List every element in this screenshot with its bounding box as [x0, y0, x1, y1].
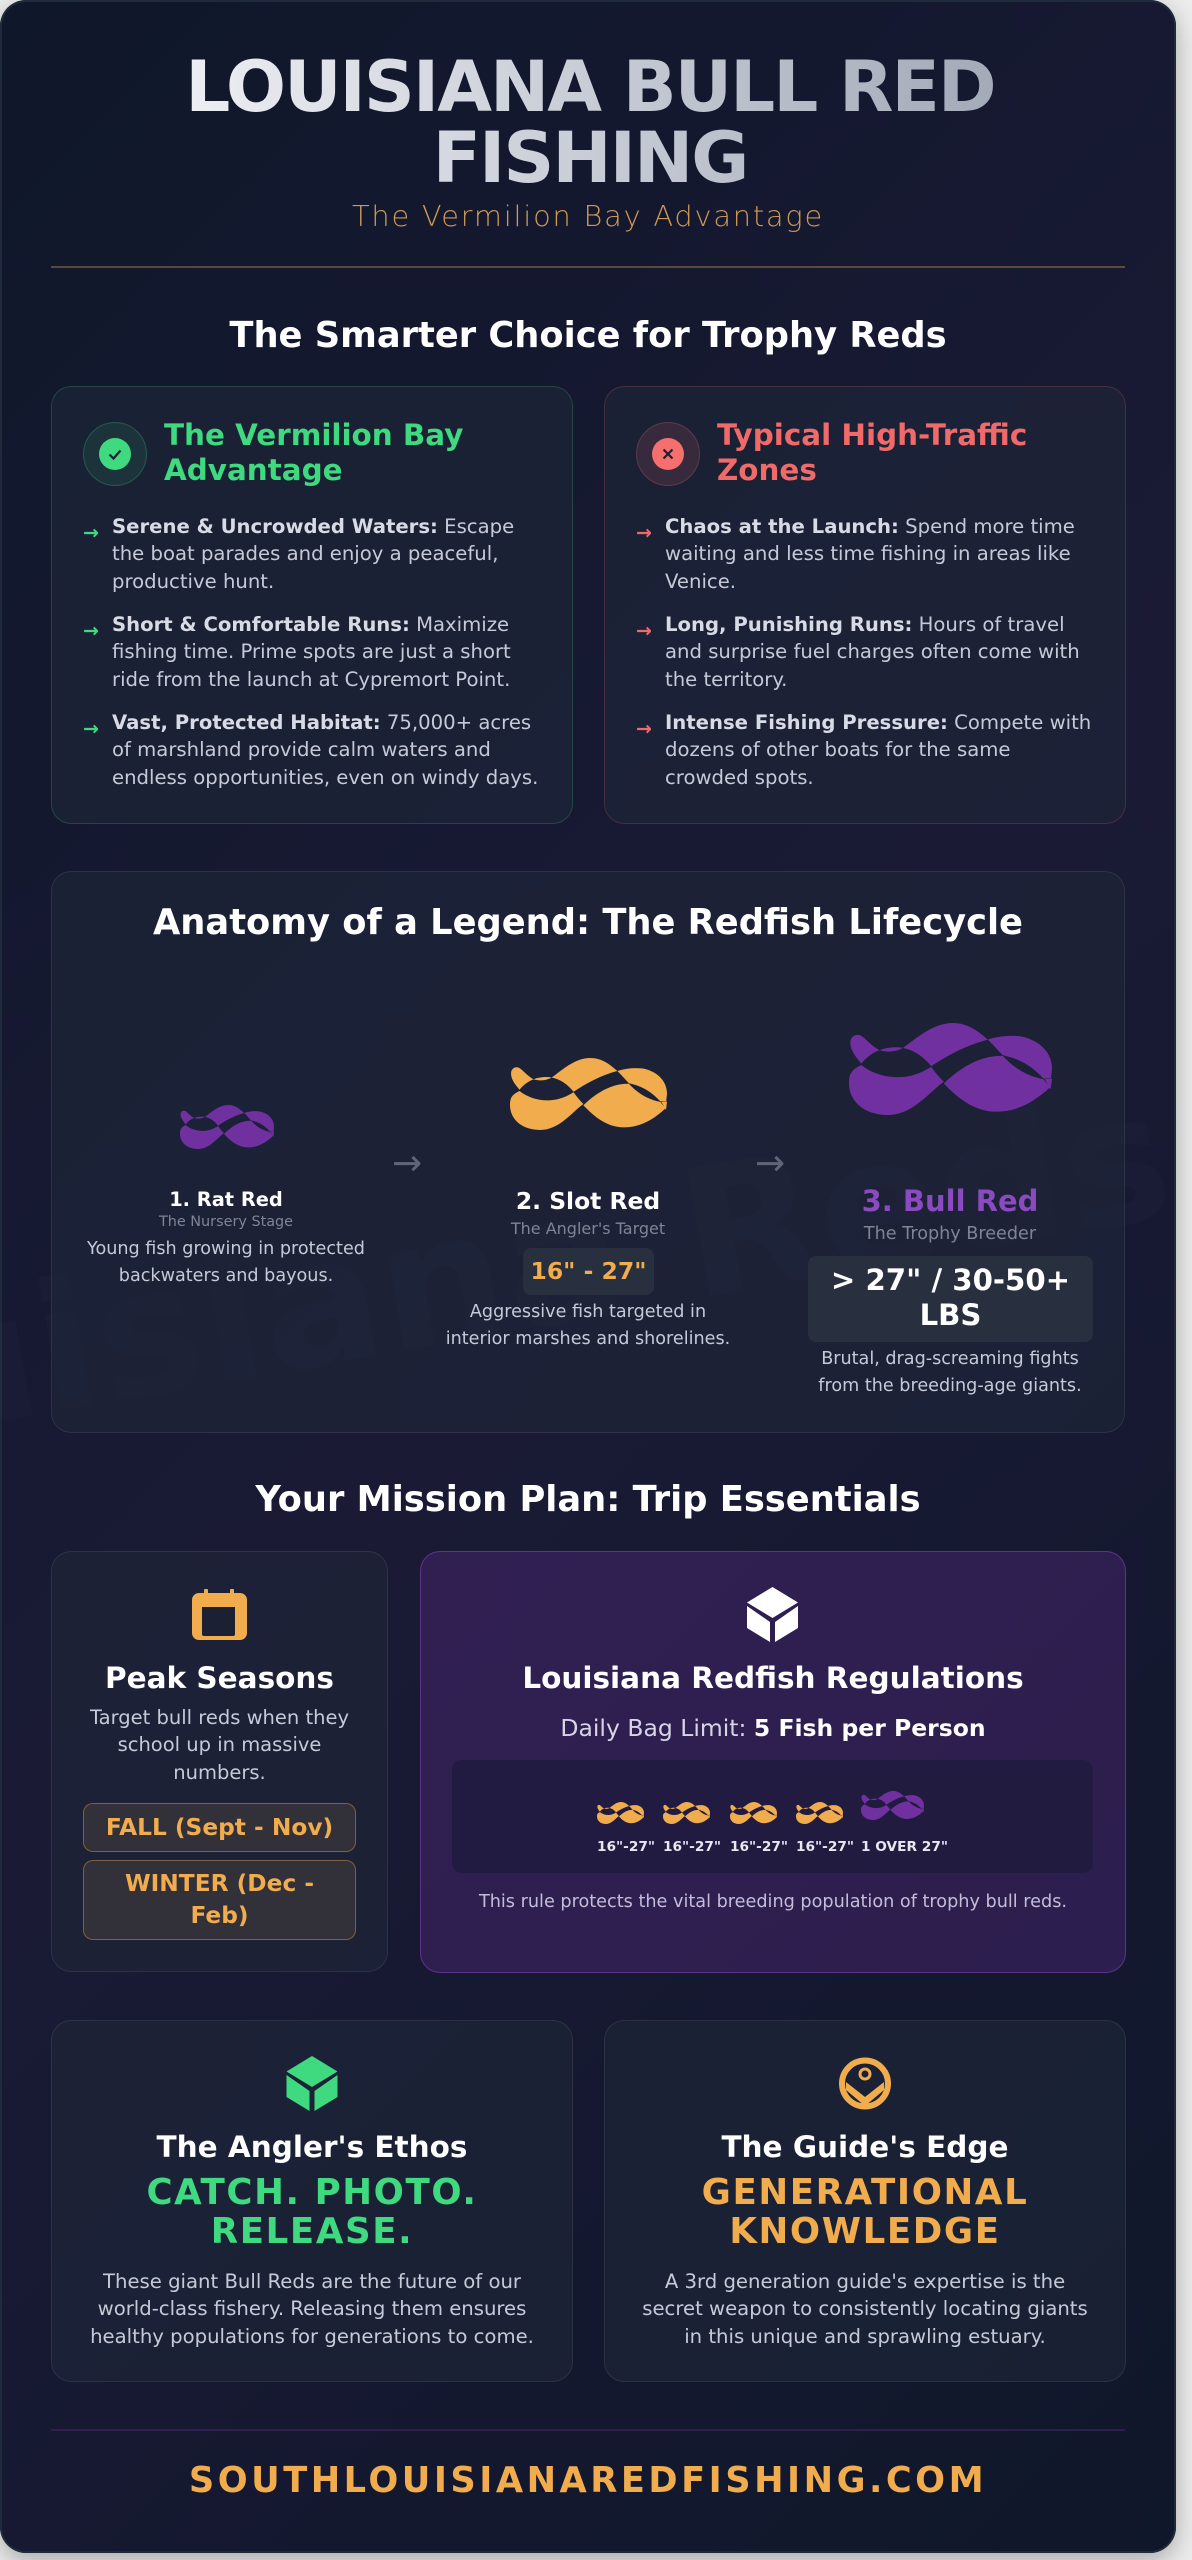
- stage subtitle: The Angler's Target: [511, 1219, 665, 1238]
- stage subtitle: The Nursery Stage: [159, 1214, 293, 1230]
- panel: angler's ethos: [51, 2020, 573, 2382]
- heading: mission plan: Your Mission Plan: Trip Essentials: [255, 1479, 921, 1520]
- panel: high traffic zones: [604, 386, 1126, 824]
- text: A 3rd generation guide's expertise is the: [665, 2270, 1065, 2293]
- panel: regulations: [420, 1551, 1126, 1973]
- text: healthy populations for generations to come.: [90, 2325, 534, 2348]
- title: LOUISIANA BULL RED FISHING: [185, 45, 995, 199]
- panel title: Advantage: [164, 453, 343, 487]
- stage name: 3. Bull Red: [862, 1184, 1038, 1218]
- list item 1: Chaos at the Launch: Spend more time: [665, 515, 1075, 538]
- title: The Angler's Ethos: [157, 2130, 467, 2164]
- slogan: GENERATIONAL: [702, 2172, 1028, 2213]
- list item 1: [112, 515, 514, 593]
- list item 1: productive hunt.: [112, 570, 274, 593]
- description: [446, 1302, 730, 1349]
- text: [642, 2270, 1088, 2348]
- text: [90, 2270, 534, 2348]
- footer url: SOUTHLOUISIANAREDFISHING.COM: [189, 2460, 987, 2501]
- list item 3: dozens of other boats for the same: [665, 738, 1010, 761]
- note: This rule protects the vital breeding population of trophy bull reds.: [479, 1892, 1067, 1912]
- slogan: RELEASE.: [211, 2211, 413, 2252]
- list item 1: [665, 515, 1075, 593]
- icon: target: [839, 2058, 891, 2110]
- slogan: [702, 2172, 1028, 2252]
- icon: calendar: [192, 1589, 247, 1640]
- size pill: 16" - 27": [530, 1257, 646, 1285]
- description: from the breeding-age giants.: [818, 1376, 1082, 1396]
- label 4: 16"-27": [796, 1839, 854, 1855]
- panel: guide's edge: [604, 2020, 1126, 2382]
- panel: peak seasons: [51, 1551, 388, 1972]
- heading: smarter choice: The Smarter Choice for Trophy Reds: [229, 315, 947, 356]
- list item 1: Serene & Uncrowded Waters: Escape: [112, 515, 514, 538]
- icon: white cube: [747, 1587, 798, 1642]
- fish icon: [849, 1023, 1052, 1115]
- text: These giant Bull Reds are the future of our: [103, 2270, 521, 2293]
- season: winter: [83, 1860, 356, 1940]
- fish icon: [180, 1105, 274, 1149]
- stage subtitle: The Trophy Breeder: [864, 1224, 1036, 1244]
- list item 3: [112, 711, 538, 789]
- panel title: [164, 418, 463, 487]
- text: [90, 1706, 349, 1784]
- panel title: [717, 418, 1027, 487]
- fish 4: [796, 1802, 843, 1824]
- list item 1: the boat parades and enjoy a peaceful,: [112, 542, 498, 565]
- header: [185, 45, 995, 233]
- list item 2: the territory.: [665, 668, 787, 691]
- season: fall: FALL (Sept - Nov): [106, 1814, 333, 1840]
- arrow 1: →: [392, 1143, 422, 1184]
- slogan: [146, 2172, 478, 2252]
- text: in this unique and sprawling estuary.: [684, 2325, 1046, 2348]
- description: Young fish growing in protected: [87, 1239, 365, 1259]
- list item 2: and surprise fuel charges often come with: [665, 640, 1080, 663]
- stage 1: rat red: [87, 1105, 365, 1286]
- arrow: →: [636, 522, 652, 544]
- text: world-class fishery. Releasing them ensures: [98, 2297, 526, 2320]
- fish 3: [730, 1802, 777, 1824]
- stage name: 2. Slot Red: [516, 1187, 660, 1215]
- size pill: [808, 1256, 1093, 1342]
- list item 3: Intense Fishing Pressure: Compete with: [665, 711, 1091, 734]
- panel title: Zones: [717, 453, 817, 487]
- text: numbers.: [173, 1761, 266, 1784]
- panel: vermilion bay advantage: [51, 386, 573, 824]
- panel title: Typical High-Traffic: [717, 418, 1027, 452]
- label 5: 1 OVER 27": [861, 1839, 948, 1855]
- panel: redfish lifecycle: [51, 871, 1125, 1433]
- description: Aggressive fish targeted in: [470, 1302, 706, 1322]
- icon: x badge: [636, 422, 700, 486]
- description: [818, 1349, 1082, 1396]
- bag limit graphic: [452, 1760, 1093, 1873]
- title: The Guide's Edge: [721, 2130, 1009, 2164]
- list item 3: [665, 711, 1091, 789]
- text: secret weapon to consistently locating giants: [642, 2297, 1088, 2320]
- size pill: > 27" / 30-50+: [831, 1263, 1070, 1297]
- fish 5: bull: [861, 1791, 924, 1820]
- arrow: →: [83, 718, 99, 740]
- list item 2: fishing time. Prime spots are just a short: [112, 640, 511, 663]
- text: school up in massive: [118, 1733, 321, 1756]
- list item 3: crowded spots.: [665, 766, 814, 789]
- description: interior marshes and shorelines.: [446, 1329, 730, 1349]
- description: [87, 1239, 365, 1286]
- arrow: →: [636, 718, 652, 740]
- size pill: LBS: [920, 1298, 981, 1332]
- slogan: CATCH. PHOTO.: [146, 2172, 478, 2213]
- list item 3: Vast, Protected Habitat: 75,000+ acres: [112, 711, 531, 734]
- heading: anatomy: Anatomy of a Legend: The Redfish Lifecycle: [153, 902, 1023, 943]
- bag limit: Daily Bag Limit: 5 Fish per Person: [560, 1714, 986, 1742]
- label 2: 16"-27": [663, 1839, 721, 1855]
- subtitle: The Vermilion Bay Advantage: [352, 199, 824, 233]
- list item 2: [665, 613, 1080, 691]
- list item 2: Long, Punishing Runs: Hours of travel: [665, 613, 1065, 636]
- list item 1: Venice.: [665, 570, 736, 593]
- arrow: →: [83, 620, 99, 642]
- title: Louisiana Redfish Regulations: [522, 1661, 1024, 1695]
- season: winter: WINTER (Dec -: [125, 1870, 314, 1897]
- list item 2: ride from the launch at Cypremort Point.: [112, 668, 510, 691]
- list item 2: [112, 613, 511, 691]
- fish 2: [663, 1802, 710, 1824]
- panel title: The Vermilion Bay: [164, 418, 463, 452]
- stage name: 1. Rat Red: [169, 1188, 283, 1211]
- text: Target bull reds when they: [90, 1706, 349, 1729]
- label 3: 16"-27": [730, 1839, 788, 1855]
- description: backwaters and bayous.: [119, 1266, 333, 1286]
- stage 2: slot red: [446, 1058, 730, 1349]
- arrow 2: →: [755, 1143, 785, 1184]
- season: fall: [83, 1803, 356, 1852]
- icon: check badge: [83, 422, 147, 486]
- title: Peak Seasons: [105, 1661, 334, 1695]
- description: Brutal, drag-screaming fights: [821, 1349, 1079, 1369]
- arrow: →: [636, 620, 652, 642]
- stage 3: bull red: [808, 1023, 1093, 1396]
- list item 3: of marshland provide calm waters and: [112, 738, 491, 761]
- icon: green cube: [286, 2056, 338, 2111]
- season: winter: Feb): [190, 1902, 249, 1929]
- fish icon: [510, 1058, 667, 1130]
- fish 1: [597, 1802, 644, 1824]
- list item 2: Short & Comfortable Runs: Maximize: [112, 613, 509, 636]
- list item 1: waiting and less time fishing in areas like: [665, 542, 1071, 565]
- arrow: →: [83, 522, 99, 544]
- slogan: KNOWLEDGE: [729, 2211, 1001, 2252]
- size pill: [523, 1248, 654, 1295]
- list item 3: endless opportunities, even on windy days.: [112, 766, 538, 789]
- label 1: 16"-27": [597, 1839, 655, 1855]
